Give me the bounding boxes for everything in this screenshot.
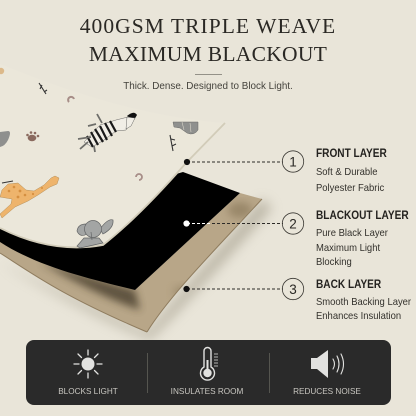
label: front layer: Polyester Fabric <box>316 182 384 194</box>
label: blackout layer: Maximum Light <box>316 242 380 254</box>
label: blackout layer <box>316 209 409 268</box>
small marks <box>0 68 176 180</box>
number badge 3 <box>282 278 304 300</box>
paw print <box>26 131 39 141</box>
shadow under fabric <box>0 199 272 340</box>
number badge 2 <box>282 213 304 234</box>
divider <box>269 353 270 393</box>
caption: insulates room: INSULATES ROOM <box>171 387 243 396</box>
label: back layer: Enhances Insulation <box>316 310 401 322</box>
title <box>80 14 336 66</box>
giraffe <box>0 176 59 218</box>
connector: blackout layer <box>183 220 283 227</box>
label: back layer: Smooth Backing Layer <box>316 296 411 308</box>
title: 400GSM TRIPLE WEAVE <box>80 14 336 38</box>
middle layer: black <box>0 172 240 290</box>
subtitle: Thick. Dense. Designed to Block Light. <box>123 81 293 92</box>
front layer: cream <box>0 64 225 248</box>
label: blackout layer: BLACKOUT LAYER <box>316 209 409 222</box>
number badge 1: 1 <box>289 154 297 170</box>
elephant left edge <box>0 131 10 147</box>
label: blackout layer: Pure Black Layer <box>316 227 388 239</box>
elephant <box>77 220 113 248</box>
connector: front layer <box>184 159 283 165</box>
connector: back layer <box>183 286 283 292</box>
label: back layer: BACK LAYER <box>316 278 381 291</box>
label: front layer: FRONT LAYER <box>316 147 387 160</box>
number badge 1 <box>282 151 304 172</box>
number badge 3: 3 <box>289 282 297 297</box>
label: blackout layer: Blocking <box>316 256 352 268</box>
layered fabric illustration <box>0 68 304 340</box>
label: front layer: Soft & Durable <box>316 166 377 178</box>
number badge 2: 2 <box>289 216 297 232</box>
label: back layer <box>316 278 411 322</box>
elephant top right <box>173 122 198 134</box>
caption: blocks light: BLOCKS LIGHT <box>58 387 118 396</box>
panel: benefits bar <box>26 340 391 405</box>
label: front layer <box>316 147 387 194</box>
zebra <box>78 113 137 152</box>
divider <box>147 353 148 393</box>
back layer: tan <box>0 193 262 332</box>
title: MAXIMUM BLACKOUT <box>89 42 327 66</box>
caption: reduces noise: REDUCES NOISE <box>293 387 361 396</box>
